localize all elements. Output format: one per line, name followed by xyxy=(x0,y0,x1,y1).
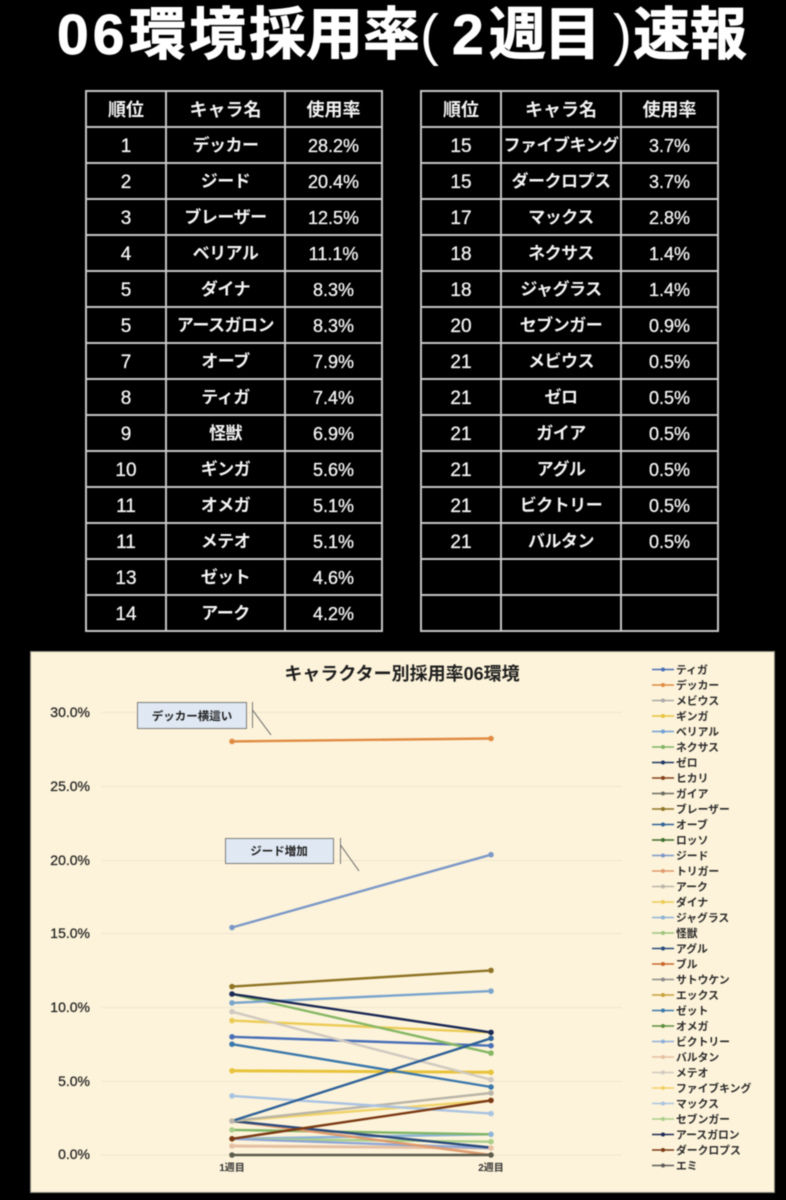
ranking table: ranks 1-14: 11 xyxy=(116,532,136,553)
legend: ベリアル xyxy=(676,726,719,738)
legend: メビウス xyxy=(676,694,719,708)
ranking table: ranks 15-21: 使用率 xyxy=(642,100,696,120)
ranking table: ranks 1-14: 11 xyxy=(116,496,136,517)
ranking table: ranks 15-21: メビウス xyxy=(528,352,594,371)
ranking table: ranks 1-14: アースガロン xyxy=(177,316,274,335)
legend: アグル xyxy=(676,942,708,956)
ranking table: ranks 1-14: オーブ xyxy=(201,352,250,371)
legend: エックス xyxy=(676,989,719,1002)
ranking table: ranks 15-21: 1.4% xyxy=(649,280,690,300)
ranking table: ranks 1-14: メテオ xyxy=(201,532,250,551)
title: 境 xyxy=(189,3,246,67)
y axis labels: 5.0% xyxy=(58,1073,90,1089)
legend: バルタン xyxy=(676,1051,719,1064)
title: 速 xyxy=(633,3,690,67)
title: 環 xyxy=(129,3,186,67)
title: 2 xyxy=(452,3,484,67)
legend: ダークロプス xyxy=(676,1143,741,1157)
ranking table: ranks 1-14: ジード xyxy=(201,172,250,191)
ranking table: ranks 1-14: 5 xyxy=(121,316,131,337)
legend: アーク xyxy=(676,880,708,894)
ranking table: ranks 1-14 xyxy=(84,89,384,633)
ranking table: ranks 15-21 xyxy=(419,89,720,633)
ranking table: ranks 15-21: 0.5% xyxy=(649,388,690,408)
title: 率 xyxy=(363,3,420,67)
ranking table: ranks 1-14: 11.1% xyxy=(309,244,358,264)
ranking table: ranks 1-14: 7 xyxy=(121,352,131,373)
ranking table: ranks 15-21: 15 xyxy=(450,136,472,157)
legend: アースガロン xyxy=(676,1128,740,1142)
ranking table: ranks 15-21: ネクサス xyxy=(528,244,594,263)
ranking table: ranks 1-14: 4 xyxy=(121,244,131,265)
title: 06 xyxy=(57,3,128,67)
ranking table: ranks 1-14: 順位 xyxy=(108,100,144,120)
ranking table: ranks 15-21: ガイア xyxy=(536,424,586,443)
ranking table: ranks 15-21: ジャグラス xyxy=(520,280,602,299)
ranking table: ranks 15-21: ダークロプス xyxy=(512,172,610,191)
legend: ファイブキング xyxy=(676,1081,751,1095)
ranking table: ranks 15-21: 0.5% xyxy=(649,352,690,372)
ranking table: ranks 15-21: ビクトリー xyxy=(520,496,602,515)
ranking table: ranks 15-21: 18 xyxy=(450,244,472,265)
title: 採 xyxy=(249,3,306,67)
callout: ジード増加 xyxy=(226,838,359,871)
x axis labels: 2週目 xyxy=(478,1161,504,1174)
ranking table: ranks 15-21: アグル xyxy=(537,460,585,479)
ranking table: ranks 15-21: 21 xyxy=(450,532,472,553)
chart title: キャラクター別採用率06環境 xyxy=(284,664,520,684)
y axis labels: 30.0% xyxy=(50,704,90,720)
title: ) xyxy=(613,3,632,67)
y axis labels: 10.0% xyxy=(50,999,90,1015)
title: 報 xyxy=(690,3,747,67)
callout: ジード増加: ジード増加 xyxy=(250,844,308,858)
legend: オメガ xyxy=(676,1019,709,1033)
ranking table: ranks 15-21: 20 xyxy=(450,316,472,337)
ranking table: ranks 15-21: 3.7% xyxy=(649,136,690,156)
legend: エミ xyxy=(676,1160,698,1172)
ranking table: ranks 15-21: 3.7% xyxy=(649,172,690,192)
title: 週 xyxy=(489,3,546,67)
legend: ビクトリー xyxy=(676,1034,730,1048)
ranking table: ranks 1-14: 12.5% xyxy=(308,208,359,228)
legend: ギンガ xyxy=(676,709,709,723)
ranking table: ranks 15-21: 17 xyxy=(450,208,472,229)
ranking table: ranks 1-14: アーク xyxy=(201,604,250,623)
legend: オーブ xyxy=(676,818,708,832)
ranking table: ranks 15-21: ゼロ xyxy=(544,388,578,407)
ranking table: ranks 1-14: 8 xyxy=(121,388,131,409)
legend: ゼロ xyxy=(676,756,698,770)
ranking table: ranks 15-21: 0.5% xyxy=(649,424,690,444)
legend: 怪獣 xyxy=(676,926,698,940)
legend: トリガー xyxy=(676,864,719,878)
legend: サトウケン xyxy=(676,974,730,986)
callout: デッカー横這い xyxy=(138,702,271,735)
legend xyxy=(652,662,751,1172)
ranking table: ranks 1-14: 怪獣 xyxy=(209,424,242,443)
ranking table: ranks 1-14: 8.3% xyxy=(313,316,354,336)
ranking table: ranks 1-14: 5.1% xyxy=(313,532,354,552)
legend: ブレーザー xyxy=(676,802,730,816)
ranking table: ranks 1-14: 9 xyxy=(121,424,131,445)
ranking table: ranks 1-14: 4.2% xyxy=(313,604,354,624)
ranking table: ranks 15-21: 21 xyxy=(450,388,472,409)
x axis labels: 1週目 xyxy=(219,1161,245,1174)
y axis labels xyxy=(50,704,90,1162)
title: 用 xyxy=(306,3,363,67)
ranking table: ranks 1-14: ティガ xyxy=(201,388,250,407)
ranking table: ranks 1-14: オメガ xyxy=(201,496,250,515)
ranking table: ranks 1-14: 3 xyxy=(121,208,131,229)
ranking table: ranks 15-21: ファイブキング xyxy=(504,136,618,155)
y axis labels: 0.0% xyxy=(58,1146,90,1162)
ranking table: ranks 1-14: 6.9% xyxy=(313,424,354,444)
ranking table: ranks 1-14: 7.9% xyxy=(313,352,354,372)
ranking table: ranks 15-21: 順位 xyxy=(443,100,479,120)
ranking table: ranks 1-14: 1 xyxy=(121,136,131,157)
ranking table: ranks 1-14: ゼット xyxy=(201,568,250,587)
title xyxy=(57,3,748,67)
ranking table: ranks 1-14: キャラ名 xyxy=(190,100,262,120)
ranking table: ranks 15-21: 21 xyxy=(450,352,472,373)
x axis labels xyxy=(219,1161,504,1174)
ranking table: ranks 1-14: ベリアル xyxy=(193,244,258,263)
ranking table: ranks 15-21: 0.9% xyxy=(649,316,690,336)
line chart panel xyxy=(29,650,776,1194)
legend: セブンガー xyxy=(676,1112,730,1126)
legend: ネクサス xyxy=(676,741,719,754)
data point markers xyxy=(229,736,494,1158)
data lines xyxy=(232,738,491,1155)
ranking table: ranks 1-14: 使用率 xyxy=(306,100,360,120)
ranking table: ranks 1-14: 7.4% xyxy=(313,388,354,408)
callout: デッカー横這い: デッカー横這い xyxy=(152,709,232,723)
ranking table: ranks 15-21: 0.5% xyxy=(649,496,690,516)
ranking table: ranks 15-21: 2.8% xyxy=(649,208,690,228)
legend: ダイナ xyxy=(676,895,708,909)
ranking table: ranks 1-14: 5.6% xyxy=(313,460,354,480)
ranking table: ranks 15-21: 0.5% xyxy=(649,532,690,552)
legend: ティガ xyxy=(676,662,708,676)
ranking table: ranks 1-14: 28.2% xyxy=(308,136,359,156)
title: ( xyxy=(420,3,439,67)
ranking table: ranks 15-21: バルタン xyxy=(528,532,594,551)
ranking table: ranks 1-14: 14 xyxy=(115,604,137,625)
legend: ガイア xyxy=(676,786,709,800)
title: 目 xyxy=(544,3,601,67)
y axis labels: 15.0% xyxy=(50,925,90,941)
ranking table: ranks 1-14: 5.1% xyxy=(313,496,354,516)
ranking table: ranks 1-14: 13 xyxy=(115,568,137,589)
legend: ジード xyxy=(676,850,708,862)
ranking table: ranks 1-14: 8.3% xyxy=(313,280,354,300)
panel background xyxy=(30,652,774,1192)
ranking table: ranks 15-21: 1.4% xyxy=(649,244,690,264)
legend: マックス xyxy=(676,1098,719,1110)
legend: ヒカリ xyxy=(676,772,708,785)
ranking table: ranks 1-14: デッカー xyxy=(192,136,258,155)
legend: ブル xyxy=(676,957,698,971)
ranking table: ranks 1-14: ダイナ xyxy=(201,280,250,299)
ranking table: ranks 15-21: 21 xyxy=(450,496,472,517)
ranking table: ranks 15-21: マックス xyxy=(528,208,594,227)
legend: ロッソ xyxy=(676,835,708,847)
ranking table: ranks 1-14: 2 xyxy=(121,172,131,193)
ranking table: ranks 1-14: 4.6% xyxy=(313,568,354,588)
ranking table: ranks 1-14: ブレーザー xyxy=(184,208,267,227)
legend: メテオ xyxy=(676,1066,708,1080)
ranking table: ranks 1-14: 5 xyxy=(121,280,131,301)
legend: デッカー xyxy=(676,678,719,692)
ranking table: ranks 1-14: 20.4% xyxy=(308,172,359,192)
ranking table: ranks 15-21: 0.5% xyxy=(649,460,690,480)
ranking table: ranks 15-21: 21 xyxy=(450,424,472,445)
ranking table: ranks 1-14: 10 xyxy=(115,460,137,481)
ranking table: ranks 15-21: 15 xyxy=(450,172,472,193)
legend: ゼット xyxy=(676,1004,708,1018)
ranking table: ranks 1-14: ギンガ xyxy=(201,460,250,479)
ranking table: ranks 15-21: キャラ名 xyxy=(525,100,597,120)
y axis labels: 25.0% xyxy=(50,778,90,794)
ranking table: ranks 15-21: 21 xyxy=(450,460,472,481)
legend: ジャグラス xyxy=(676,910,729,924)
ranking table: ranks 15-21: 18 xyxy=(450,280,472,301)
y axis labels: 20.0% xyxy=(50,852,90,868)
ranking table: ranks 15-21: セブンガー xyxy=(520,316,602,335)
